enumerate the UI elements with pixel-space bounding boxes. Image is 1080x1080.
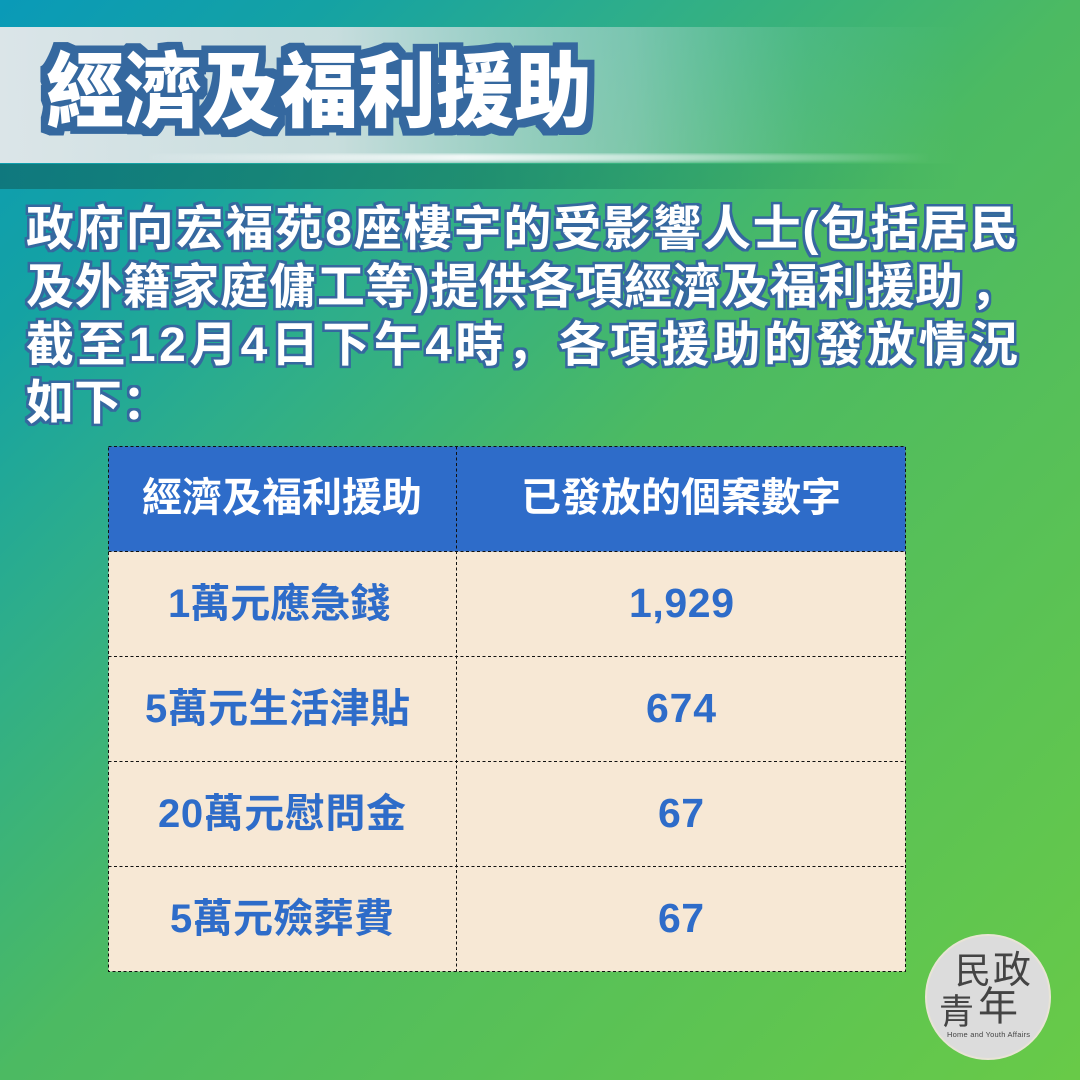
row: 5萬元生活津貼: 674 (646, 685, 716, 731)
table header row: 已發放的個案數字 (521, 476, 841, 520)
row: 1萬元應急錢 (168, 580, 734, 626)
intro paragraph: 政府向宏福苑8座樓宇的受影響人士(包括居民 (26, 203, 1018, 256)
table body background (108, 552, 906, 972)
row: 20萬元慰問金: 67 (658, 790, 704, 836)
row: 1萬元應急錢: 1,929 (629, 580, 734, 626)
row: 5萬元生活津貼 (145, 685, 716, 731)
logo: 民 (955, 942, 991, 994)
title: 經濟及福利援助 (46, 26, 592, 145)
title banner (0, 27, 960, 189)
logo: 年 (978, 974, 1018, 1032)
intro paragraph: ， (970, 247, 1018, 317)
row: 5萬元殮葬費: 5萬元殮葬費 (170, 897, 394, 941)
table (108, 446, 906, 972)
table header row (108, 446, 906, 552)
row: 5萬元殮葬費 (170, 895, 704, 941)
intro paragraph (26, 203, 1018, 433)
row: 20萬元慰問金 (158, 790, 704, 836)
table header row: 經濟及福利援助 (142, 476, 422, 520)
row: 5萬元殮葬費: 67 (658, 895, 704, 941)
row: 5萬元生活津貼: 5萬元生活津貼 (145, 687, 410, 731)
logo (926, 935, 1050, 1059)
intro paragraph: 如下： (26, 363, 170, 433)
intro paragraph: 截至12月4日下午4時，各項援助的發放情況 (26, 305, 1018, 375)
row: 20萬元慰問金: 20萬元慰問金 (158, 792, 406, 836)
row: 1萬元應急錢: 1萬元應急錢 (168, 582, 390, 626)
logo: 政 (993, 939, 1031, 994)
logo: 青 (939, 984, 974, 1035)
intro paragraph: 及外籍家庭傭工等)提供各項經濟及福利援助 (26, 261, 963, 314)
logo: Home and Youth Affairs (947, 1030, 1030, 1039)
